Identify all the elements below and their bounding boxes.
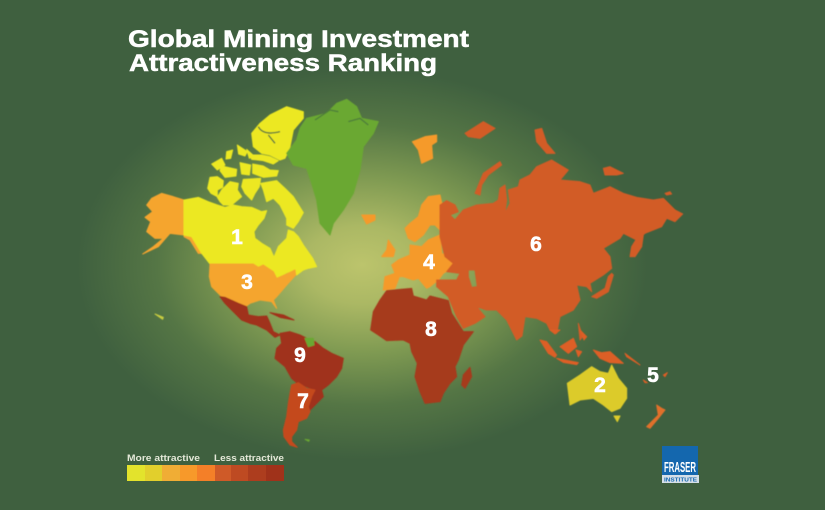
title (128, 26, 469, 77)
rank numbers: 3 (241, 271, 253, 294)
Australia (567, 365, 627, 412)
legend labels: More attractive (127, 453, 200, 464)
rank numbers: 7 (297, 390, 309, 413)
Argentina and Chile (283, 383, 315, 447)
title: Attractiveness Ranking (129, 50, 437, 77)
title: Global Mining Investment (128, 26, 469, 53)
Greenland fjords (315, 110, 368, 125)
Tasmania (614, 416, 620, 422)
Svalbard (412, 135, 437, 163)
Greenland (287, 99, 378, 235)
Falkland Islands (305, 439, 309, 441)
Canada (184, 107, 317, 278)
legend colour scale (127, 465, 284, 481)
Mexico and Central America (220, 297, 280, 337)
world map (143, 99, 683, 447)
rank numbers: 1 (231, 226, 243, 249)
Latin America (155, 297, 343, 447)
North America (143, 99, 378, 308)
rank numbers: 8 (425, 318, 437, 341)
United States (209, 264, 296, 308)
Eurasia (362, 122, 683, 340)
Caribbean (270, 313, 294, 320)
Alaska (143, 193, 202, 254)
rank numbers: 9 (294, 344, 306, 367)
Hawaii (155, 314, 163, 319)
Brazil and northern South America (275, 332, 343, 410)
New Zealand (647, 405, 665, 428)
Suriname (305, 338, 314, 347)
logo: Fraser Institute: INSTITUTE (664, 478, 697, 484)
logo: Fraser Institute (662, 446, 699, 484)
rank numbers: 5 (647, 364, 659, 387)
Russia and Asia (437, 122, 683, 340)
rank numbers (231, 226, 659, 413)
Iceland (362, 215, 375, 224)
Ellesmere inlets (258, 127, 280, 143)
legend (127, 453, 284, 481)
rank numbers: 4 (423, 251, 435, 274)
Africa (371, 288, 473, 403)
logo: Fraser Institute: FRASER (664, 459, 696, 476)
legend labels: Less attractive (214, 453, 284, 464)
Southeast Asia and Melanesia (540, 330, 667, 383)
rank numbers: 2 (594, 374, 606, 397)
Europe (382, 195, 455, 290)
Oceania and Southeast Asia (540, 330, 667, 428)
legend labels (127, 453, 284, 464)
rank numbers: 6 (530, 233, 542, 256)
